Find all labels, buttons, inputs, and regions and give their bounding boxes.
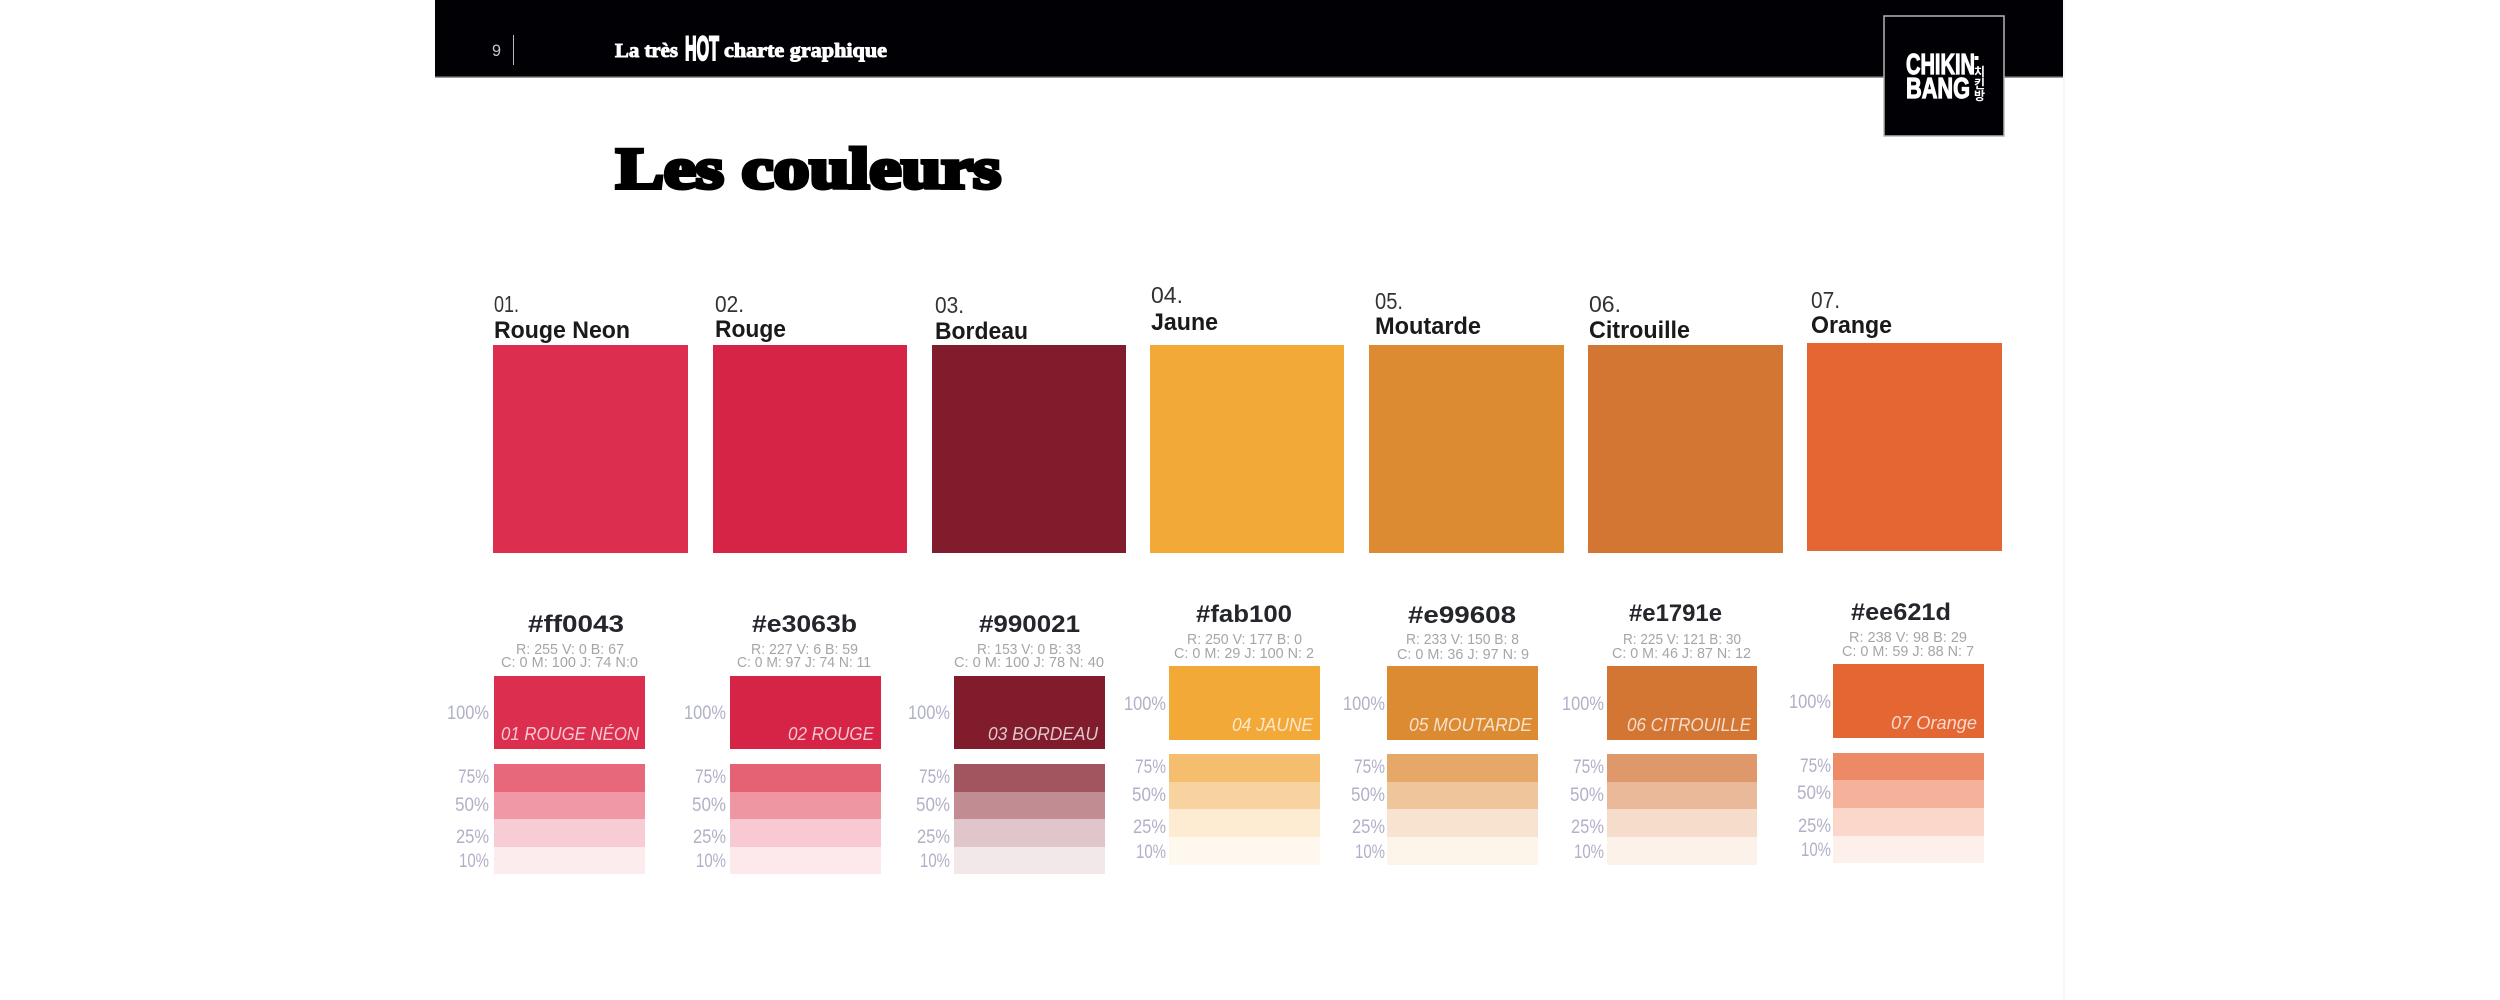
panel: tints 05: 50% — [1351, 785, 1385, 806]
panel: tints 06: 25% — [1571, 817, 1604, 838]
panel: tints 06: 50% — [1570, 785, 1604, 806]
panel: tints 07 — [1789, 599, 1984, 863]
panel: tints 01: #ff0043 — [528, 611, 624, 638]
panel: tints 03: 50% — [916, 795, 950, 816]
panel: colour 04 swatch — [1150, 282, 1344, 553]
panel: colour 07 swatch: 07. — [1811, 287, 1840, 313]
panel: tints 04: 100% — [1124, 694, 1166, 715]
header bar — [435, 0, 2063, 78]
panel: tints 06 — [1562, 600, 1757, 865]
panel: tints 03: 25% — [917, 827, 950, 848]
panel: tints 03: #990021 — [979, 611, 1080, 638]
logo: Chikin Bang: BANG — [1906, 73, 1970, 105]
panel: tints 04: C: 0 M: 29 J: 100 N: 2 — [1174, 645, 1314, 662]
header title: charte graphique — [724, 40, 887, 62]
panel: colour 04 swatch: 04. — [1151, 282, 1183, 308]
panel: tints 07: R: 238 V: 98 B: 29 — [1849, 629, 1967, 646]
panel: tints 02: #e3063b — [752, 611, 857, 638]
panel: tints 07: 100% — [1789, 692, 1831, 713]
logo: Chikin Bang: 치 — [1974, 65, 1985, 79]
logo: Chikin Bang — [1884, 16, 2004, 136]
panel: tints 07: 25% — [1798, 816, 1831, 837]
panel: tints 05: 25% — [1352, 817, 1385, 838]
panel: tints 01: 100% — [447, 703, 489, 724]
panel: tints 05: #e99608 — [1408, 602, 1516, 629]
panel: colour 07 swatch: Orange — [1811, 312, 1892, 339]
panel: tints 06: 10% — [1574, 842, 1604, 863]
panel: tints 05: 05 MOUTARDE — [1409, 715, 1533, 735]
panel: colour 03 swatch: 03. — [935, 292, 964, 318]
panel: tints 02: R: 227 V: 6 B: 59 — [751, 641, 858, 658]
panel: colour 02 swatch: 02. — [715, 291, 744, 317]
panel: tints 04 — [1124, 601, 1320, 865]
panel: colour 06 swatch — [1588, 291, 1783, 553]
panel: tints 03: 100% — [908, 703, 950, 724]
panel: tints 05: C: 0 M: 36 J: 97 N: 9 — [1397, 646, 1529, 663]
panel: tints 05 — [1343, 602, 1538, 865]
panel: tints 07: #ee621d — [1851, 599, 1951, 626]
panel: tints 03 — [908, 611, 1105, 874]
panel: tints 04: 04 JAUNE — [1232, 715, 1314, 735]
panel: tints 07: 10% — [1801, 840, 1831, 861]
panel: tints 06: R: 225 V: 121 B: 30 — [1623, 631, 1741, 648]
logo: Chikin Bang: 킨 — [1974, 77, 1985, 91]
panel: tints 06: 100% — [1562, 694, 1604, 715]
panel: tints 04: R: 250 V: 177 B: 0 — [1187, 631, 1302, 648]
panel: colour 01 swatch: Rouge Neon — [494, 317, 630, 344]
panel: tints 02: C: 0 M: 97 J: 74 N: 11 — [737, 654, 871, 671]
page number: 9 — [492, 41, 501, 60]
panel: tints 05: 100% — [1343, 694, 1385, 715]
panel: colour 06 swatch: Citrouille — [1589, 317, 1690, 344]
panel: tints 02: 75% — [695, 767, 726, 788]
panel: colour 06 swatch: 06. — [1589, 291, 1621, 317]
panel: tints 05: 75% — [1354, 757, 1385, 778]
panel: colour 05 swatch: Moutarde — [1375, 313, 1481, 340]
panel: colour 07 swatch — [1807, 287, 2002, 551]
panel: tints 03: R: 153 V: 0 B: 33 — [977, 641, 1081, 658]
panel: colour 02 swatch — [713, 291, 907, 553]
panel: tints 06: 75% — [1573, 757, 1604, 778]
panel: tints 03: C: 0 M: 100 J: 78 N: 40 — [954, 654, 1104, 671]
panel: colour 03 swatch — [932, 292, 1126, 553]
panel: colour 02 swatch: Rouge — [715, 316, 786, 343]
logo: Chikin Bang: 방 — [1974, 89, 1985, 103]
panel: colour 05 swatch: 05. — [1375, 288, 1403, 314]
panel: tints 01: C: 0 M: 100 J: 74 N:0 — [501, 654, 638, 671]
header title: La très — [615, 40, 678, 62]
panel: tints 07: 07 Orange — [1891, 713, 1977, 733]
panel: tints 02: 02 ROUGE — [788, 724, 875, 744]
panel: tints 02 — [684, 611, 881, 874]
panel: tints 07: 75% — [1800, 756, 1831, 777]
panel: tints 03: 10% — [920, 851, 950, 872]
panel: tints 07: 50% — [1797, 783, 1831, 804]
panel: tints 02: 10% — [696, 851, 726, 872]
panel: tints 02: 50% — [692, 795, 726, 816]
panel: tints 07: C: 0 M: 59 J: 88 N: 7 — [1842, 643, 1974, 660]
panel: tints 01 — [447, 611, 645, 874]
panel: tints 02: 25% — [693, 827, 726, 848]
logo: Chikin Bang: CHIKIN — [1906, 49, 1975, 81]
panel: tints 06: C: 0 M: 46 J: 87 N: 12 — [1612, 645, 1751, 662]
title: Les couleurs — [616, 136, 1001, 201]
panel: tints 03: 75% — [919, 767, 950, 788]
panel: tints 01: 01 ROUGE NÉON — [501, 724, 640, 744]
panel: tints 06: #e1791e — [1629, 600, 1722, 627]
panel: tints 04: #fab100 — [1196, 601, 1292, 628]
panel: tints 04: 10% — [1136, 842, 1166, 863]
panel: colour 03 swatch: Bordeau — [935, 318, 1028, 345]
panel: tints 01: 10% — [459, 851, 489, 872]
panel: tints 01: 75% — [458, 767, 489, 788]
panel: tints 04: 25% — [1133, 817, 1166, 838]
panel: tints 02: 100% — [684, 703, 726, 724]
panel: tints 01: 25% — [456, 827, 489, 848]
panel: tints 01: R: 255 V: 0 B: 67 — [516, 641, 624, 658]
panel: colour 04 swatch: Jaune — [1151, 309, 1218, 336]
panel: colour 01 swatch: 01. — [494, 291, 519, 317]
panel: tints 05: 10% — [1355, 842, 1385, 863]
panel: colour 05 swatch — [1369, 288, 1564, 553]
panel: tints 04: 75% — [1135, 757, 1166, 778]
panel: tints 05: R: 233 V: 150 B: 8 — [1406, 631, 1519, 648]
panel: tints 03: 03 BORDEAU — [988, 724, 1099, 744]
panel: tints 04: 50% — [1132, 785, 1166, 806]
panel: tints 06: 06 CITROUILLE — [1627, 715, 1752, 735]
header title: HOT — [685, 30, 719, 68]
header title — [615, 30, 887, 68]
panel: tints 01: 50% — [455, 795, 489, 816]
panel: colour 01 swatch — [493, 291, 688, 553]
